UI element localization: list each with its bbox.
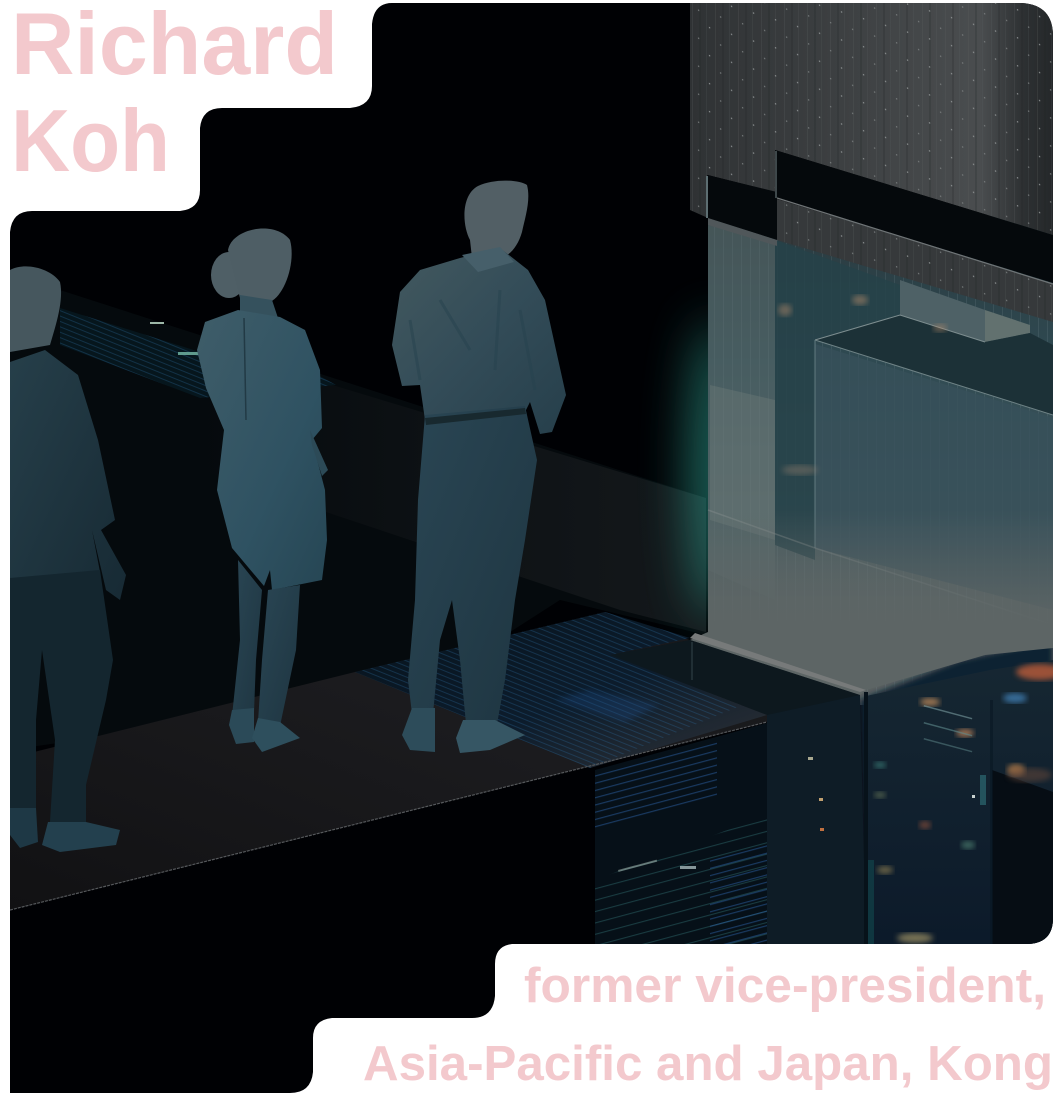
back slab behind the figures bbox=[10, 290, 706, 750]
title bbox=[11, 0, 338, 190]
title: Koh bbox=[11, 91, 170, 190]
right structure: upper perforated wall bbox=[690, 0, 1053, 235]
teal glow bbox=[692, 320, 740, 620]
lower right data towers bbox=[708, 646, 1053, 944]
right structure: glass interior bbox=[708, 215, 1053, 705]
fog band above the pillar edge bbox=[690, 510, 1053, 695]
pit between platform and tower bbox=[690, 640, 860, 714]
figure: left man bbox=[10, 266, 126, 852]
role caption: Asia-Pacific and Japan, Kong bbox=[363, 1037, 1053, 1091]
role caption bbox=[363, 959, 1053, 1091]
figure: right man bbox=[392, 181, 566, 753]
figure: woman bbox=[197, 229, 328, 752]
foreground platform bbox=[10, 612, 767, 910]
right structure: black beams bbox=[707, 150, 1053, 322]
role caption: former vice-president, bbox=[524, 959, 1046, 1013]
front block with data lines bbox=[595, 723, 767, 944]
